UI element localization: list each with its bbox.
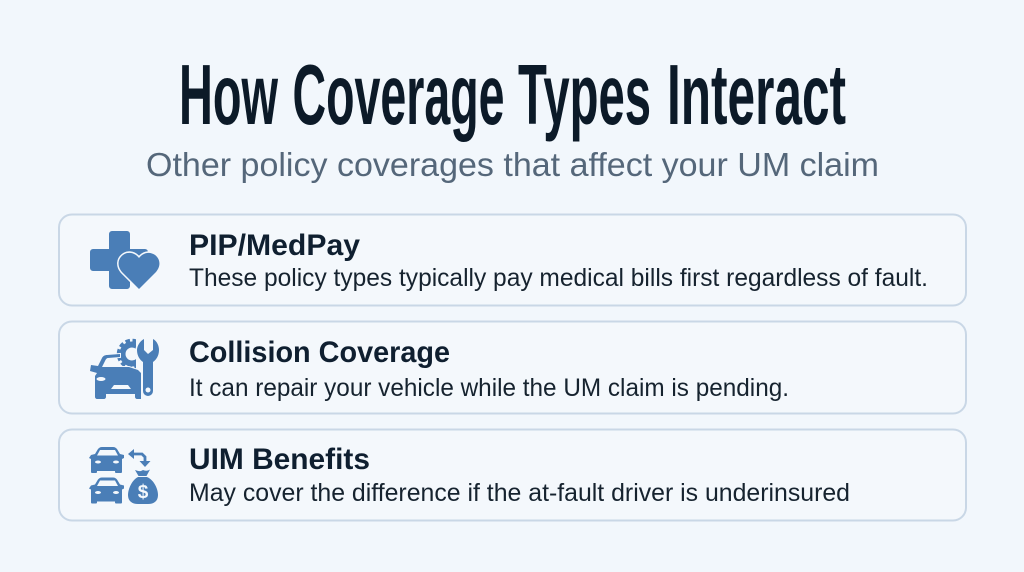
title: Types — [518, 48, 651, 143]
card description: It can repair your vehicle while the UM claim is pending. — [189, 374, 789, 402]
card heading: Collision Coverage — [189, 336, 450, 369]
icon: medical cross with heart — [90, 231, 159, 289]
card heading: PIP/MedPay — [189, 229, 360, 262]
icon: cars, arrows and money bag — [89, 447, 158, 504]
panel: PIP/MedPay — [59, 214, 966, 306]
icon: car with gear and wrench — [90, 339, 159, 399]
card description: May cover the difference if the at-fault driver is underinsured — [189, 479, 850, 507]
title — [179, 48, 846, 143]
subtitle: Other policy coverages that affect your UM claim — [146, 146, 879, 183]
panel: Collision Coverage — [59, 322, 966, 414]
title: Coverage — [292, 48, 504, 143]
title: How — [179, 48, 278, 143]
panel: UIM Benefits — [59, 430, 966, 520]
card description: These policy types typically pay medical bills first regardless of fault. — [189, 264, 928, 292]
card heading: UIM Benefits — [189, 443, 370, 476]
icon: cars, arrows and money bag: $ — [138, 482, 149, 503]
title: Interact — [667, 48, 846, 143]
